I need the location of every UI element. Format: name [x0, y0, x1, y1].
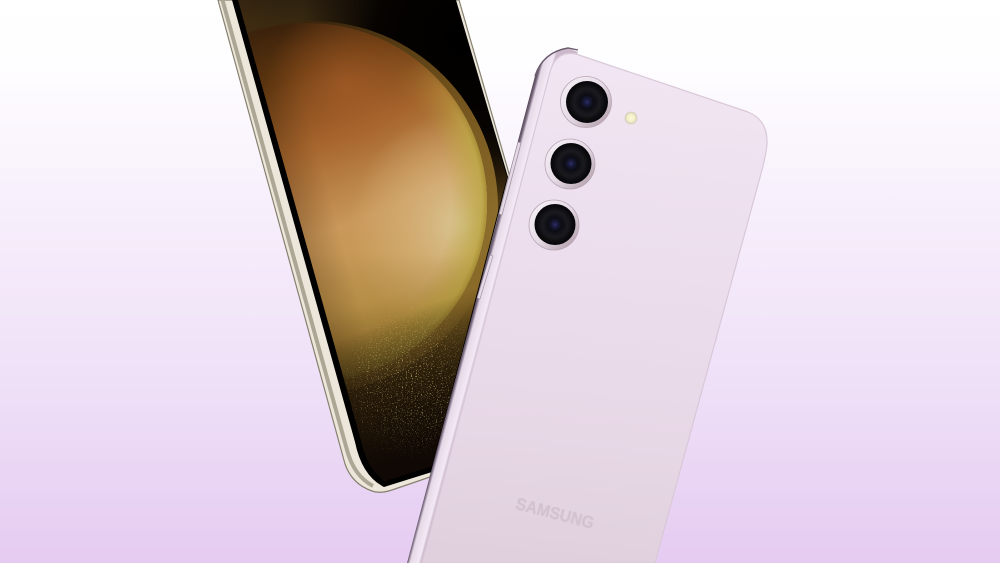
phone: front with wallpaper	[217, 0, 510, 493]
phone: back in lavender	[407, 48, 767, 563]
screen bezel	[232, 0, 508, 487]
top edge shadow	[535, 48, 578, 76]
phone frame	[218, 0, 510, 492]
camera: top lens	[560, 76, 612, 128]
gold glitter	[341, 306, 467, 459]
side buttons	[477, 142, 521, 299]
back panel	[422, 53, 767, 563]
frame inner stripe	[222, 0, 373, 486]
screen wallpaper	[238, 0, 507, 481]
camera: middle lens	[545, 139, 595, 189]
flash	[625, 112, 637, 124]
camera: bottom lens	[529, 200, 579, 250]
side rail	[407, 48, 578, 563]
brand logo: SAMSUNG	[514, 494, 596, 533]
